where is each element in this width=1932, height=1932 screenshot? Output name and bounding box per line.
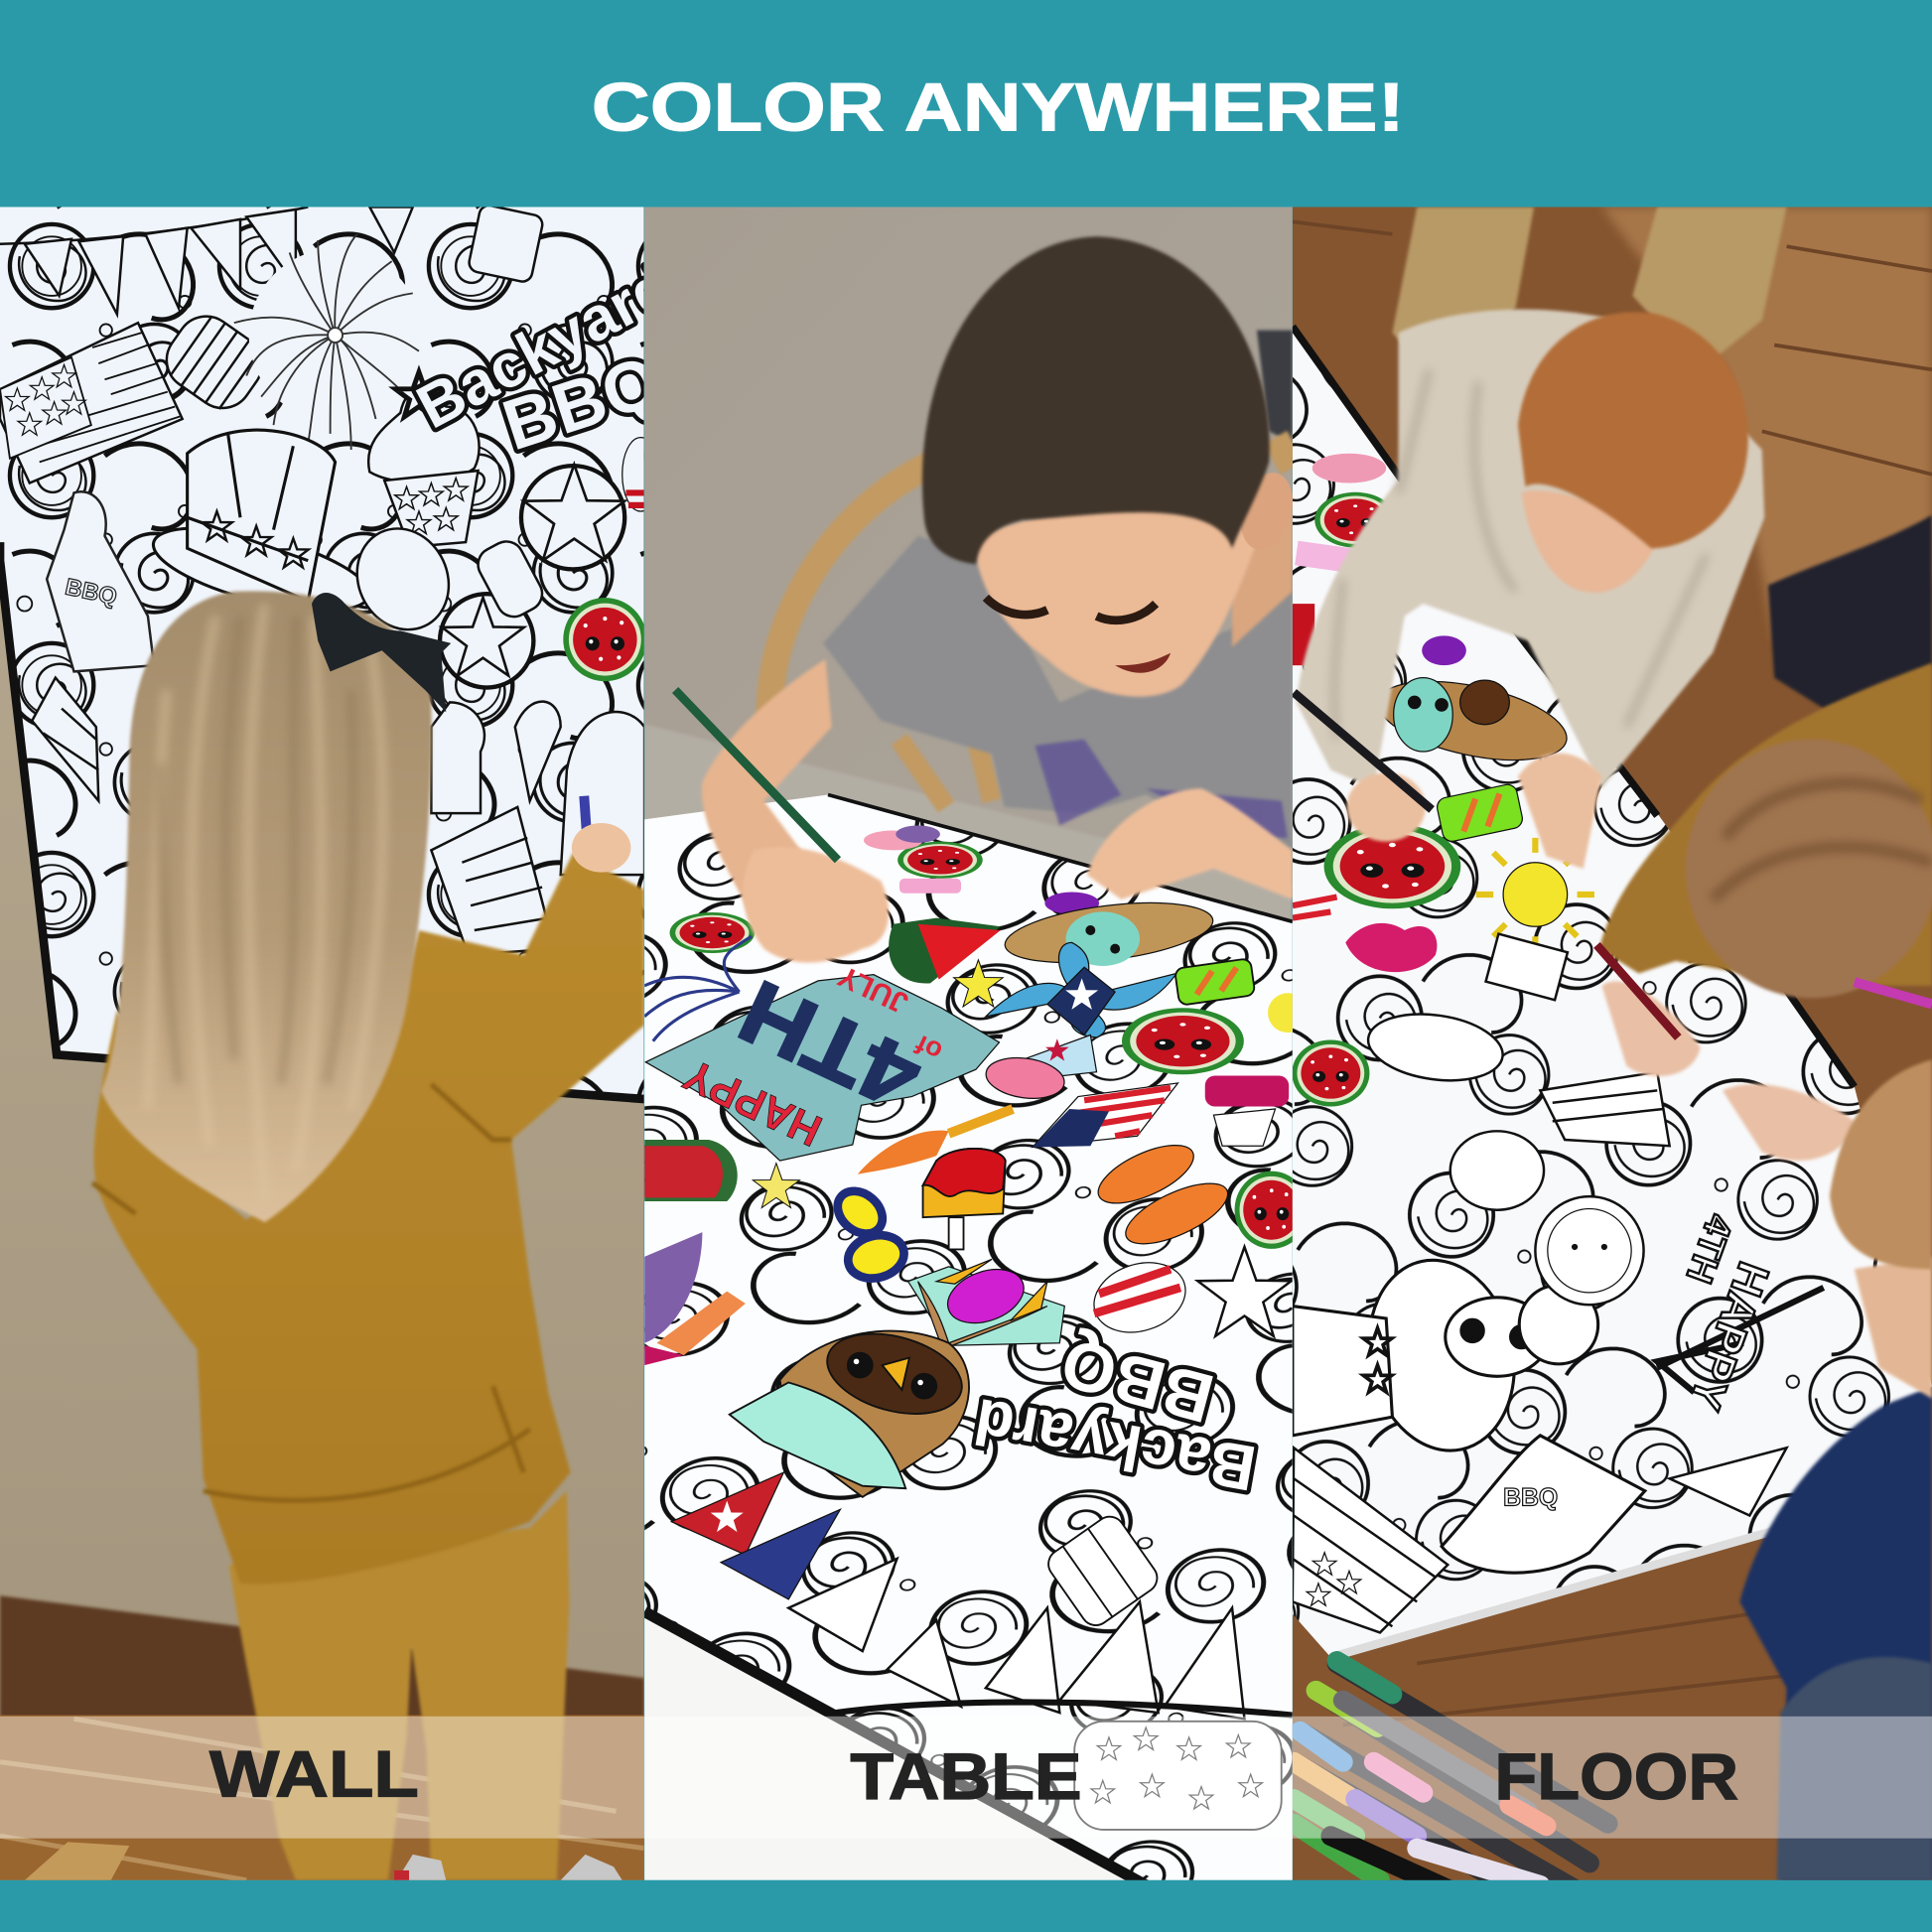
backyard bbq upside down [969, 1323, 1261, 1504]
hands [1601, 981, 1855, 1161]
eyes and smile [986, 598, 1171, 673]
coloring poster on table [644, 788, 1309, 1885]
star in circle [521, 465, 624, 569]
watermelon large [1122, 1008, 1244, 1074]
small owl [1002, 894, 1216, 972]
backyard bbq upside down: BBQ [1053, 1323, 1221, 1439]
red marker [1596, 945, 1678, 1037]
backyard bbq lettering: Backyard [406, 251, 683, 442]
translucent label band [0, 1717, 1932, 1839]
hair [101, 591, 432, 1222]
pants [229, 1491, 569, 1880]
boy lying on floor [1294, 207, 1787, 869]
wall background [644, 207, 1293, 897]
shoes [394, 1855, 622, 1880]
red stripes [1293, 897, 1337, 918]
wall background [0, 207, 644, 1880]
watermelon right [1235, 1172, 1309, 1249]
navy sweater [1739, 1386, 1932, 1880]
star outline [1197, 1247, 1292, 1336]
panel: floor photo [1292, 207, 1932, 1897]
dark monitor edge [1257, 331, 1293, 444]
sunglasses [829, 1182, 908, 1285]
ear [1233, 467, 1301, 556]
boy at table [675, 236, 1301, 963]
poster border [0, 542, 644, 1099]
face [973, 492, 1257, 697]
yellow star small [753, 1164, 799, 1207]
header band [0, 0, 1932, 207]
pink marker [1855, 982, 1932, 1004]
hair [1830, 1059, 1932, 1269]
popsicle red yellow [923, 1149, 1006, 1249]
sun [1268, 993, 1308, 1033]
blue pinwheel star [986, 942, 1176, 1037]
paintbrush [858, 1109, 1013, 1174]
popsicles and ice cream [341, 204, 644, 875]
hand and crayon [572, 795, 630, 873]
bunting [0, 207, 413, 314]
flag doodle [1293, 1448, 1448, 1632]
girl [92, 591, 644, 1880]
marker pens [1294, 1661, 1608, 1897]
hair boy [922, 236, 1270, 564]
footer band [0, 1880, 1932, 1932]
hair bow [312, 593, 451, 712]
small flag cone [32, 678, 98, 801]
dark trousers [1768, 515, 1932, 709]
right hand [1087, 788, 1293, 899]
lettering: 4TH [1679, 1209, 1741, 1289]
watermelons [1314, 492, 1396, 548]
poster edge [644, 1611, 1146, 1885]
firework colored [644, 936, 752, 1041]
pink creature [1345, 923, 1437, 972]
face [1522, 490, 1657, 593]
apron BBQ [47, 491, 154, 671]
watermelon left [644, 1140, 738, 1201]
coloring poster on wall [0, 204, 683, 1106]
cone and flag [1450, 1072, 1787, 1516]
label: wall: WALL [209, 1736, 419, 1810]
happy 4th of july sign: 4TH [725, 962, 934, 1130]
mustard sweater [94, 853, 644, 1584]
big owl [730, 1320, 971, 1497]
top hat [151, 429, 365, 610]
mustard jacket [1599, 663, 1932, 986]
owl face doodle [1446, 1285, 1598, 1376]
popsicle outline [1364, 934, 1568, 1088]
arm [702, 659, 832, 918]
panel: table photo [644, 207, 1309, 1885]
table surface [644, 725, 1293, 936]
hat doodle [1293, 1247, 1532, 1464]
writing hand [743, 847, 889, 963]
baseboard [0, 1595, 644, 1725]
label: table: TABLE [850, 1739, 1082, 1813]
happy 4th of july sign: JULY [833, 959, 913, 1020]
purple wing and orange [644, 1232, 746, 1365]
wood floor [1293, 207, 1932, 1880]
american flag [1033, 1083, 1177, 1147]
shirt print [1035, 740, 1288, 838]
cupcake [368, 372, 480, 547]
spatula [1657, 1288, 1824, 1392]
boy in mustard jacket [1596, 515, 1932, 1161]
small top watermelons [897, 842, 983, 879]
khaki legs [1392, 207, 1787, 382]
lower flag [431, 807, 554, 955]
bunting colored [671, 1472, 840, 1599]
firework [234, 234, 421, 450]
green pencil [675, 690, 838, 860]
happy 4th of july sign [645, 959, 1000, 1161]
apron BBQ: BBQ [63, 574, 119, 610]
flag [0, 323, 183, 483]
watermelon slice [889, 918, 1001, 984]
coloring poster on floor [1292, 321, 1932, 1663]
sweater folds [92, 1084, 530, 1500]
lettering: HAPPY [1680, 1256, 1778, 1416]
bunting outline [788, 1559, 1293, 1719]
jeans [1777, 1657, 1932, 1880]
title: COLOR ANYWHERE! [592, 70, 1405, 146]
cream sweater [1297, 310, 1764, 788]
boy in navy sweater [1739, 1059, 1932, 1880]
happy 4th of july sign: HAPPY [676, 1049, 829, 1155]
red striped ball [621, 437, 643, 512]
reddish hair [1518, 312, 1748, 548]
pink items [1293, 454, 1466, 665]
grey t-shirt [823, 536, 1293, 857]
pink shapes [864, 826, 1099, 914]
owl [1371, 667, 1574, 774]
popsicle stripes [165, 315, 260, 410]
star outline [440, 594, 533, 688]
magenta egg and bird wings [908, 1259, 1064, 1349]
pink creature [1205, 1075, 1289, 1146]
pillow with stars [1074, 1722, 1282, 1830]
yellow star [954, 960, 1003, 1007]
label: floor: FLOOR [1494, 1739, 1738, 1813]
backyard bbq upside down: Backyard [969, 1385, 1261, 1504]
face [1855, 1257, 1932, 1399]
hair [1686, 740, 1932, 998]
neck [1232, 492, 1293, 647]
panel: wall photo [0, 204, 683, 1880]
wooden chair [769, 438, 1293, 807]
green popsicle [1436, 782, 1524, 843]
green popsicle [1174, 958, 1255, 1006]
wood floor [0, 1716, 644, 1880]
black marker [1294, 692, 1432, 809]
poster edges [1293, 327, 1855, 1657]
cotton candy [983, 1035, 1097, 1103]
apron doodle [1442, 1436, 1645, 1573]
happy 4th of july sign: of [909, 1029, 947, 1068]
orange flip flops [1090, 1134, 1236, 1256]
clock doodle [1535, 1196, 1644, 1305]
striped ball [1085, 1251, 1194, 1343]
hands [1346, 754, 1601, 869]
lower table white [644, 1601, 1140, 1880]
watermelon [563, 598, 646, 681]
sun [1476, 838, 1594, 951]
popsicle outline [1042, 1511, 1163, 1631]
apron doodle: BBQ [1503, 1485, 1558, 1512]
backyard bbq lettering: BBQ [493, 342, 669, 466]
